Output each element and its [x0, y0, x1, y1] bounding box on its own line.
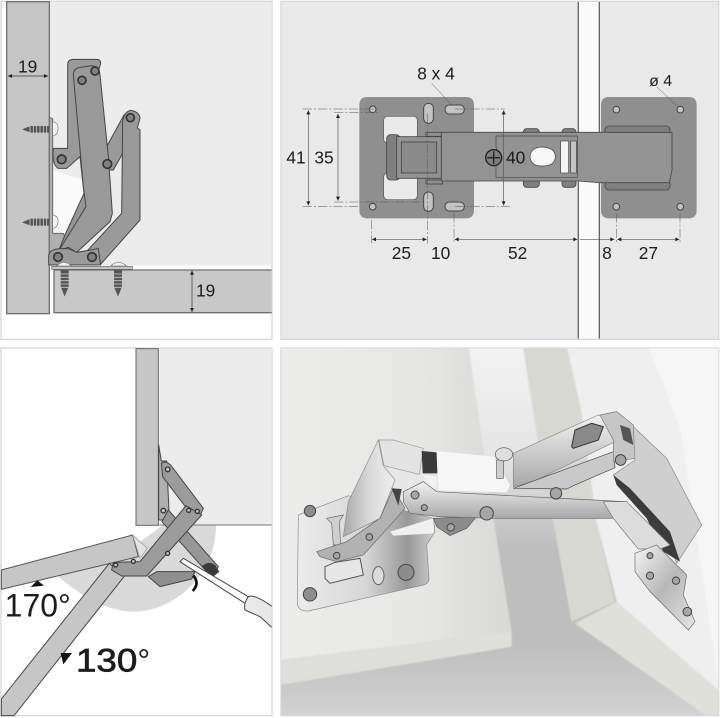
panel: opening angle diagram: [1, 348, 277, 716]
door at 130 degrees: [1, 563, 124, 716]
adjusting screw: [486, 150, 502, 166]
dimension: 19 cabinet side: [8, 57, 48, 77]
right door lower edge: [575, 602, 720, 718]
dimension: 19 door: 19: [196, 281, 215, 301]
right hinge cup: [513, 415, 615, 487]
adjusting screw: [495, 448, 513, 478]
left hinge cup side: [343, 440, 395, 537]
angle label 130: 130: [76, 643, 137, 679]
dimension labels: ø 4: [649, 73, 672, 90]
left door face: [280, 345, 512, 660]
right knuckle: [600, 412, 635, 462]
left mounting plate: [359, 97, 474, 218]
right dark linkage: [613, 475, 680, 562]
hinge pivots: [54, 67, 134, 261]
dimension: 19 door: [192, 271, 215, 312]
dark window: [422, 451, 437, 473]
rivets: [333, 455, 692, 616]
hinge body: [387, 126, 672, 190]
dimension labels: 8: [602, 243, 612, 263]
dimension labels: 40: [506, 147, 525, 167]
light backdrop right: [666, 388, 718, 683]
line: [159, 523, 272, 526]
right cup lower strip: [513, 452, 615, 489]
plate screws: [303, 505, 414, 601]
left mounting plate: [297, 496, 435, 611]
right arm descent: [603, 502, 670, 549]
hinge pivots: [114, 467, 215, 573]
oval opening: [572, 423, 603, 448]
black adjustment cam: [202, 563, 219, 577]
right mounting plate: [601, 97, 697, 218]
left cup adjuster: [327, 515, 343, 545]
dimension lines: [303, 83, 680, 243]
right door face: [588, 440, 718, 690]
cabinet side board: [7, 2, 49, 314]
hinge: [49, 59, 140, 265]
rotation arrow: [193, 576, 197, 591]
hinge linkage: [112, 445, 218, 587]
small lower link: [433, 517, 477, 536]
dimension labels: 52: [508, 243, 527, 263]
door at 170 degrees: [1, 535, 138, 589]
mounting holes: [369, 103, 684, 211]
panel: hinge product photo: [280, 345, 720, 718]
mounting plate: [52, 266, 132, 269]
panel: side view with 19 mm dimensions: [1, 1, 272, 339]
left door front edge: [280, 632, 512, 685]
dimension labels: [286, 63, 672, 263]
door board: [54, 270, 272, 313]
dimension labels: 41: [286, 147, 306, 167]
rectangular slot: [561, 141, 576, 173]
left hinge cup top: [379, 440, 423, 474]
screws: [22, 122, 127, 297]
centre block: [437, 451, 510, 492]
lower left bracket: [317, 488, 405, 562]
right lower bracket: [635, 545, 695, 630]
dimension labels: 8 x 4: [417, 63, 455, 83]
oval opening: [530, 147, 555, 166]
swing arc: [58, 525, 216, 612]
light wedge: [390, 518, 434, 536]
screwdriver: [180, 558, 277, 632]
dimension: 19 cabinet side: 19: [18, 57, 37, 77]
right door hinge cup: [613, 427, 702, 563]
angle label 170: 170°: [5, 588, 71, 624]
background wall: [280, 345, 720, 718]
angle label 130: °: [137, 643, 150, 679]
dimension labels: 27: [639, 243, 658, 263]
long centre arm: [403, 482, 627, 518]
gap between cabinet and door: [578, 2, 599, 339]
panel: front view with hole spacing dimensions: [281, 1, 719, 339]
dimension labels: 35: [314, 147, 334, 167]
dimension labels: 10: [431, 243, 450, 263]
angle label 130: [61, 643, 150, 679]
left plate cutouts: [384, 116, 417, 200]
dimension labels: 25: [392, 243, 411, 263]
vertical frame: [523, 345, 615, 622]
cabinet side board: [136, 349, 158, 525]
